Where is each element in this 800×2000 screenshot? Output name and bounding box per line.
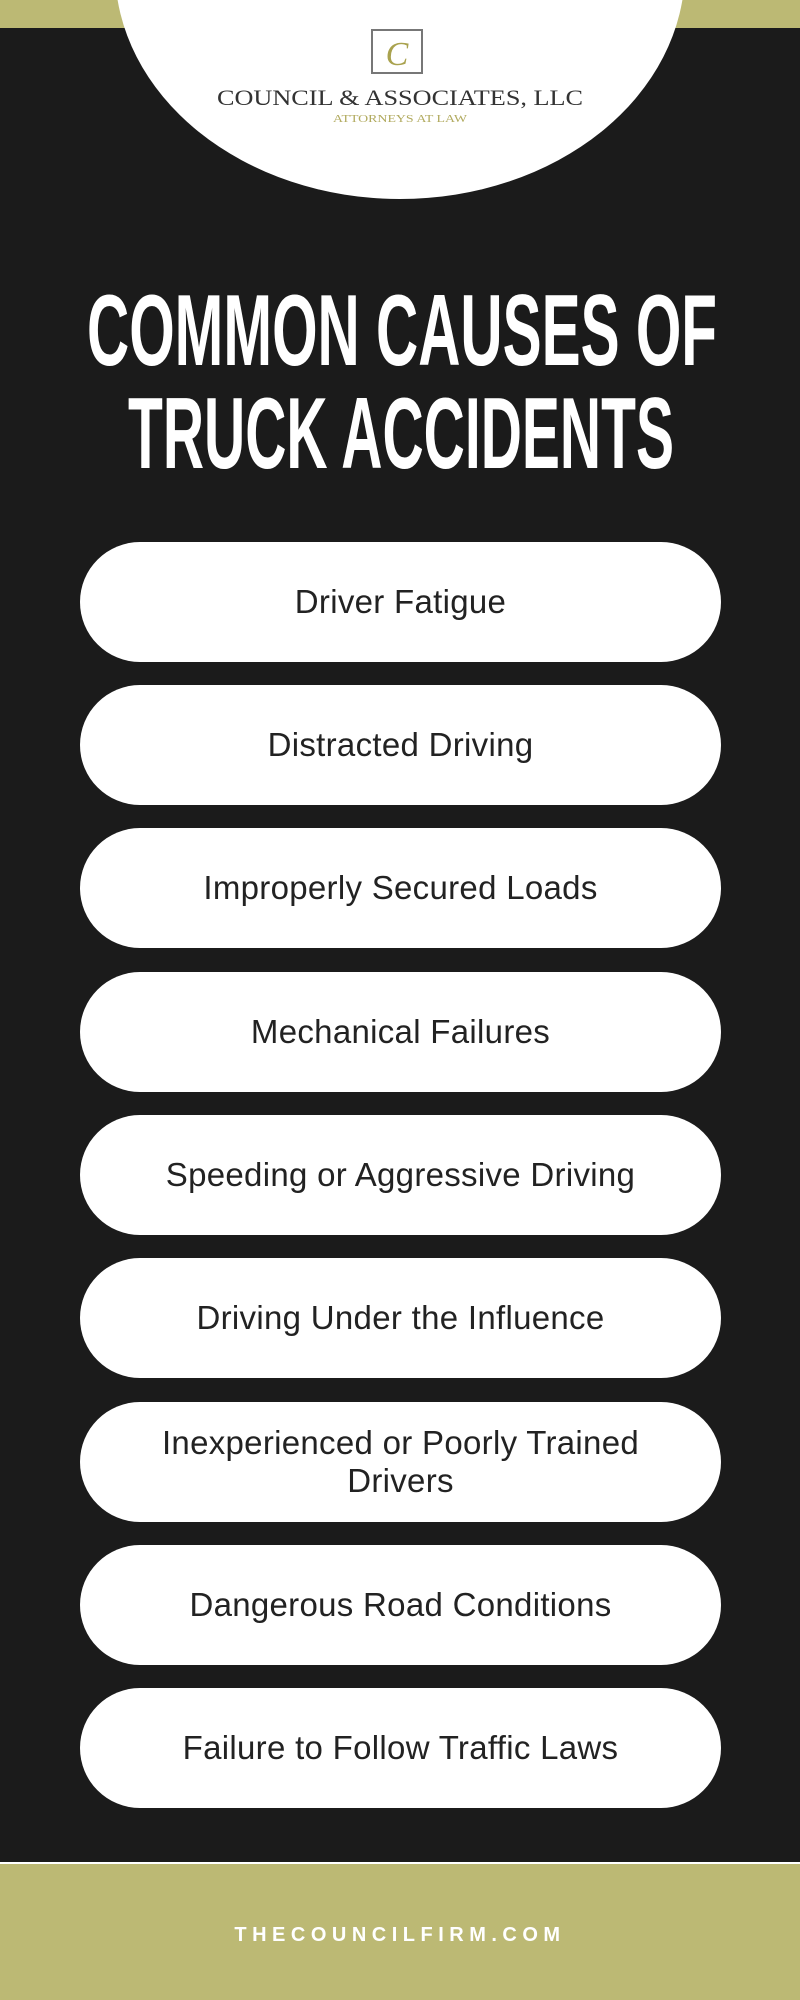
- pill: inexperienced: Drivers: [347, 1462, 454, 1499]
- title: [87, 275, 717, 490]
- logo circle: [115, 0, 685, 199]
- pill: road conditions: Dangerous Road Conditions: [189, 1586, 612, 1623]
- pill: driver fatigue: Driver Fatigue: [295, 583, 506, 620]
- icon: monogram C: C: [386, 36, 409, 73]
- pill: traffic laws: Failure to Follow Traffic Laws: [183, 1729, 618, 1766]
- pill: road conditions: [80, 1545, 721, 1665]
- pill: loads: [80, 828, 721, 948]
- logo: [217, 29, 583, 125]
- pill: inexperienced: [80, 1402, 721, 1522]
- pill: distracted driving: [80, 685, 721, 805]
- pill: mechanical: Mechanical Failures: [251, 1013, 550, 1050]
- pill: speeding: Speeding or Aggressive Driving: [166, 1156, 635, 1193]
- pill: speeding: [80, 1115, 721, 1235]
- company name: COUNCIL & ASSOCIATES, LLC: [217, 85, 583, 110]
- pill: distracted driving: Distracted Driving: [268, 726, 533, 763]
- pill: inexperienced: Inexperienced or Poorly Trained: [162, 1424, 639, 1461]
- pill: loads: Improperly Secured Loads: [203, 869, 598, 906]
- pill: DUI: Driving Under the Influence: [196, 1299, 604, 1336]
- pill: traffic laws: [80, 1688, 721, 1808]
- pill: mechanical: [80, 972, 721, 1092]
- footer: [0, 1862, 800, 2000]
- tagline: ATTORNEYS AT LAW: [333, 114, 468, 125]
- icon: monogram C: [372, 30, 422, 73]
- pill: DUI: [80, 1258, 721, 1378]
- top gold bar: [0, 0, 800, 28]
- footer url: THECOUNCILFIRM.COM: [234, 1924, 566, 1946]
- pill: driver fatigue: [80, 542, 721, 662]
